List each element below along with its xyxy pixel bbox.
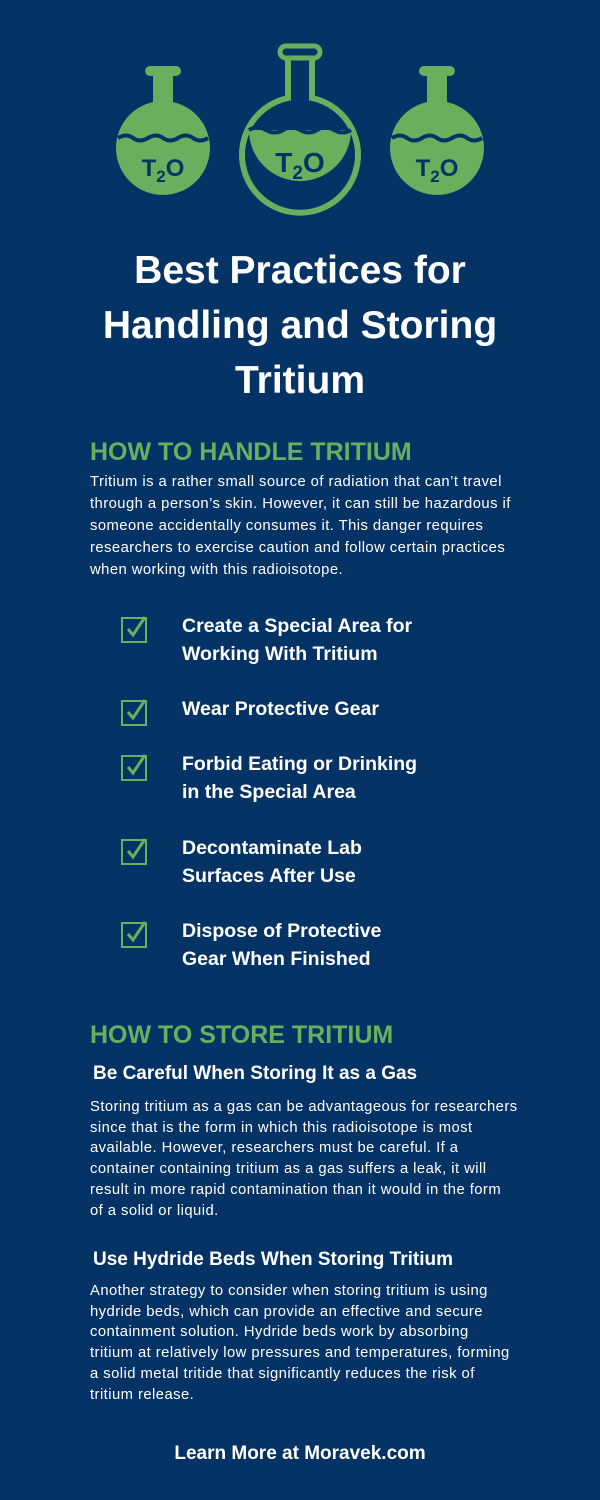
title: Tritium — [235, 359, 365, 402]
text: gas: container containing tritium as a gas suffers a leak, it will — [90, 1161, 486, 1177]
text: gas: since that is the form in which this radioisotope is most — [90, 1120, 473, 1136]
text: hydride: tritium at relatively low pressures and temperatures, forming — [90, 1345, 510, 1361]
intro text: someone accidentally consumes it. This danger requires — [90, 518, 483, 534]
text: gas: available. However, researchers must be careful. If a — [90, 1140, 458, 1156]
item 3: Forbid Eating or Drinking — [182, 753, 417, 775]
icon: middle flask: O — [303, 147, 325, 178]
item 4: Surfaces After Use — [182, 865, 356, 887]
heading: how to handle: HOW TO HANDLE TRITIUM — [90, 438, 412, 466]
text: gas: result in more rapid contamination than it would in the form — [90, 1182, 501, 1198]
icon: right flask: 2 — [430, 167, 440, 186]
item 3: in the Special Area — [182, 781, 356, 803]
item 1 — [121, 615, 412, 665]
text: gas — [90, 1099, 518, 1219]
item 1: Working With Tritium — [182, 643, 378, 665]
text: hydride: Another strategy to consider when storing tritium is using — [90, 1283, 488, 1299]
footer: Learn More at Moravek.com — [174, 1443, 426, 1464]
intro text: Tritium is a rather small source of radiation that can’t travel — [90, 474, 502, 490]
item 5: Gear When Finished — [182, 948, 371, 970]
item 2: Wear Protective Gear — [182, 698, 379, 720]
icon: middle flask: 2 — [292, 163, 303, 184]
icon: left flask: T — [142, 155, 156, 182]
item 1: Create a Special Area for — [182, 615, 412, 637]
title: Best Practices for — [134, 249, 466, 292]
text: hydride — [90, 1283, 510, 1403]
item 3 — [121, 753, 417, 803]
icon: right flask — [390, 66, 484, 195]
intro text: researchers to exercise caution and follow certain practices — [90, 540, 505, 556]
item 2 — [121, 698, 379, 726]
icon: right flask: O — [440, 155, 458, 182]
text: hydride: hydride beds, which can provide an effective and secure — [90, 1304, 483, 1320]
icon: middle flask — [242, 46, 358, 213]
intro text: through a person’s skin. However, it can still be hazardous if — [90, 496, 511, 512]
flask icons — [116, 44, 484, 216]
text: gas: of a solid or liquid. — [90, 1203, 219, 1219]
text: hydride: containment solution. Hydride beds work by absorbing — [90, 1324, 469, 1340]
intro text: when working with this radioisotope. — [90, 562, 343, 578]
subheading: hydride: Use Hydride Beds When Storing Tritium — [93, 1249, 453, 1270]
intro text — [90, 474, 511, 578]
text: hydride: tritium release. — [90, 1387, 194, 1403]
item 5 — [121, 920, 381, 970]
icon: left flask: O — [166, 155, 184, 182]
text: hydride: a solid metal tritide that significantly reduces the risk of — [90, 1366, 475, 1382]
icon: left flask — [116, 66, 210, 195]
item 4 — [121, 837, 362, 887]
item 4: Decontaminate Lab — [182, 837, 362, 859]
checklist — [121, 615, 417, 970]
subheading: gas: Be Careful When Storing It as a Gas — [93, 1063, 417, 1084]
icon: left flask: 2 — [156, 167, 166, 186]
item 5: Dispose of Protective — [182, 920, 381, 942]
icon: right flask: T — [416, 155, 430, 182]
title: Handling and Storing — [103, 304, 497, 347]
icon: middle flask: T — [275, 147, 292, 178]
title — [103, 249, 497, 402]
heading: how to store: HOW TO STORE TRITIUM — [90, 1021, 393, 1049]
text: gas: Storing tritium as a gas can be advantageous for researchers — [90, 1099, 518, 1115]
